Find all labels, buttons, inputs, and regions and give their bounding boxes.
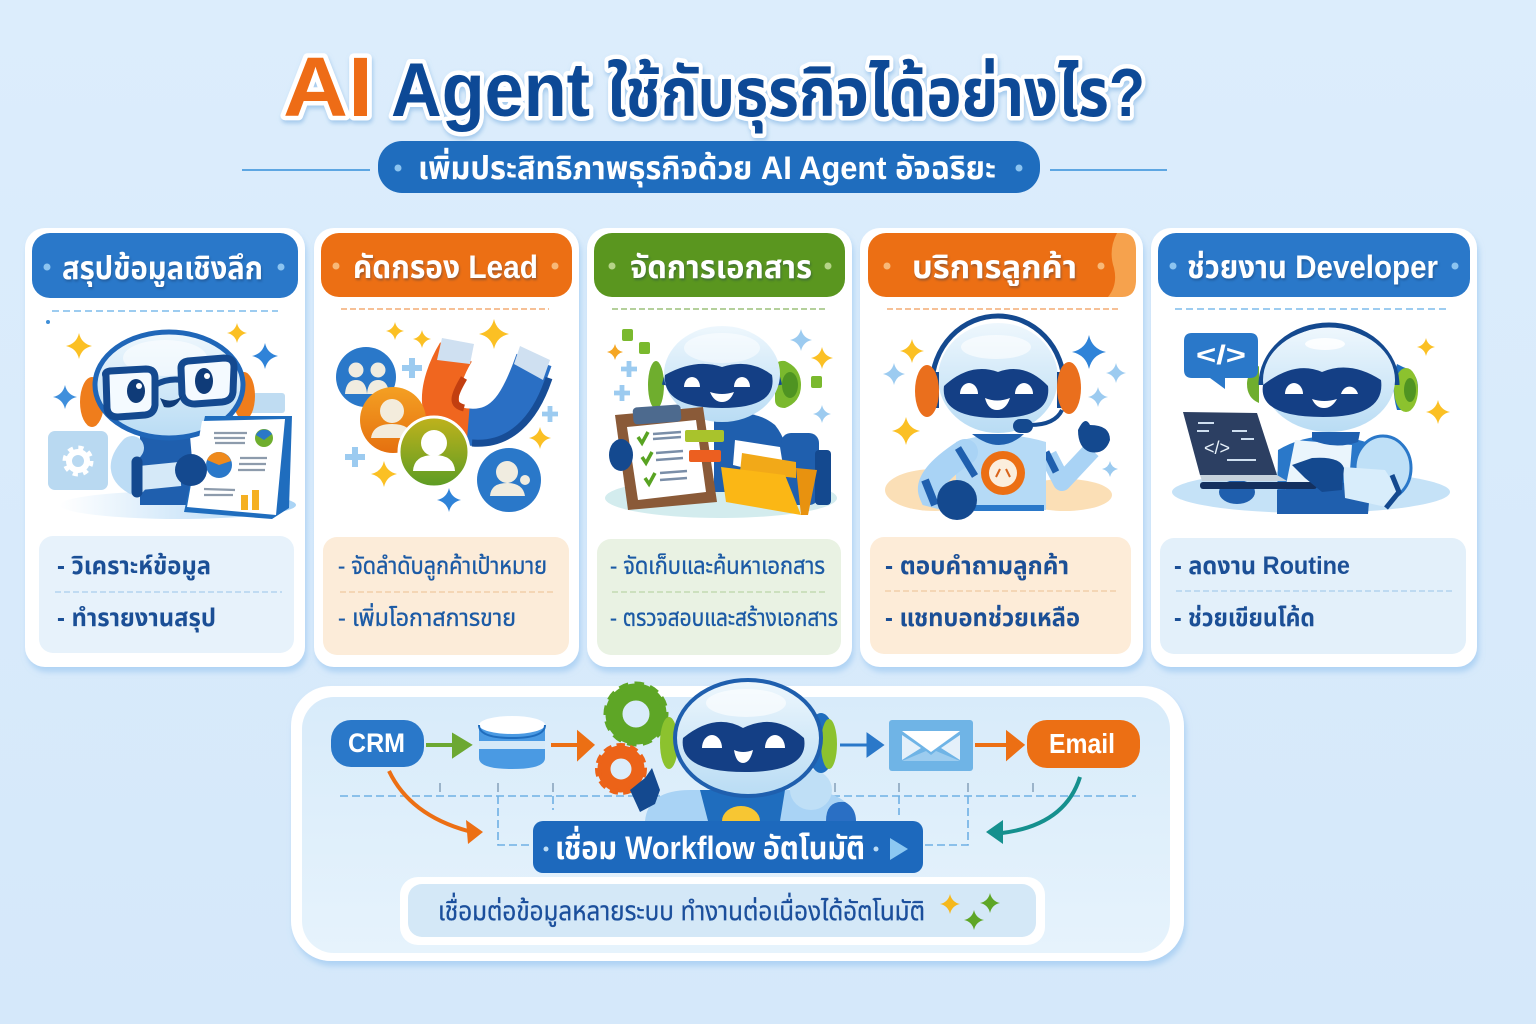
icon: robot with report (48, 323, 296, 519)
list 1: - ทำรายงานสรุป (57, 604, 216, 633)
workflow banner: เชื่อม Workflow อัตโนมัติ (555, 825, 865, 866)
icon: robot developer with laptop (1172, 325, 1450, 514)
card heading 2 (321, 233, 572, 297)
panel: จัดการเอกสาร (587, 228, 852, 667)
list 1: - วิเคราะห์ข้อมูล (57, 552, 211, 581)
icon: database (479, 716, 545, 769)
arrow: CRM to database (426, 736, 469, 755)
title: AI (283, 40, 373, 134)
icon: magnet attracting leads (336, 319, 558, 512)
panel: คัดกรอง Lead (314, 228, 579, 667)
workflow description: เชื่อมต่อข้อมูลหลายระบบ ทำงานต่อเนื่องได้อัตโนมัติ (438, 892, 925, 927)
card heading 5: ช่วยงาน Developer (1187, 249, 1438, 285)
list 3: - จัดเก็บและค้นหาเอกสาร (610, 552, 825, 580)
list 5: - ลดงาน Routine (1174, 552, 1350, 580)
workflow banner (533, 821, 923, 873)
title: Agent (391, 48, 590, 133)
list 3 (597, 539, 841, 655)
card heading 5 (1158, 233, 1470, 297)
CRM node: CRM (348, 728, 405, 758)
panel: workflow (291, 680, 1184, 961)
title (283, 40, 1145, 134)
subtitle banner (242, 141, 1167, 193)
list 2: - จัดลำดับลูกค้าเป้าหมาย (338, 553, 547, 581)
workflow description (400, 877, 1045, 945)
panel: บริการลูกค้า (860, 228, 1143, 667)
arrow: CRM down to workflow (389, 771, 483, 844)
CRM node (331, 720, 424, 767)
title: ใช้กับธุรกิจได้อย่างไร? (607, 55, 1145, 134)
icon: robot developer with laptop: </> (1204, 438, 1230, 458)
panel: ช่วยงาน Developer (1151, 228, 1477, 667)
card heading 1 (32, 233, 298, 298)
card heading 4: บริการลูกค้า (912, 249, 1077, 286)
icon: robot developer with laptop: </> (1196, 340, 1246, 370)
list 4: - ตอบคำถามลูกค้า (885, 552, 1069, 581)
card heading 2: คัดกรอง Lead (353, 249, 538, 285)
icon: robot with clipboard and folder (605, 326, 837, 518)
icon: robot customer service (883, 316, 1126, 520)
arrow: robot to email icon (840, 735, 882, 755)
card heading 4 (868, 233, 1136, 297)
Email node (1027, 720, 1140, 768)
icon: envelope (889, 720, 973, 771)
card heading 1: สรุปข้อมูลเชิงลึก (62, 250, 263, 287)
arrow: database to robot (551, 734, 592, 757)
card heading 3: จัดการเอกสาร (630, 249, 812, 285)
list 4: - แชทบอทช่วยเหลือ (885, 604, 1080, 632)
list 5: - ช่วยเขียนโค้ด (1174, 604, 1315, 632)
arrow: Email down to workflow (986, 777, 1080, 844)
card heading 3 (594, 233, 845, 297)
list 1 (39, 536, 294, 653)
list 2: - เพิ่มโอกาสการขาย (338, 602, 516, 632)
panel: สรุปข้อมูลเชิงลึก (25, 228, 305, 667)
icon: robot with gears (598, 680, 856, 821)
list 3: - ตรวจสอบและสร้างเอกสาร (610, 605, 838, 632)
Email node: Email (1049, 728, 1115, 759)
list 5 (1160, 538, 1466, 654)
list 4 (870, 537, 1131, 654)
list 2 (323, 537, 569, 655)
subtitle banner: เพิ่มประสิทธิภาพธุรกิจด้วย AI Agent อัจฉริยะ (418, 147, 996, 187)
arrow: envelope to Email (975, 734, 1022, 757)
